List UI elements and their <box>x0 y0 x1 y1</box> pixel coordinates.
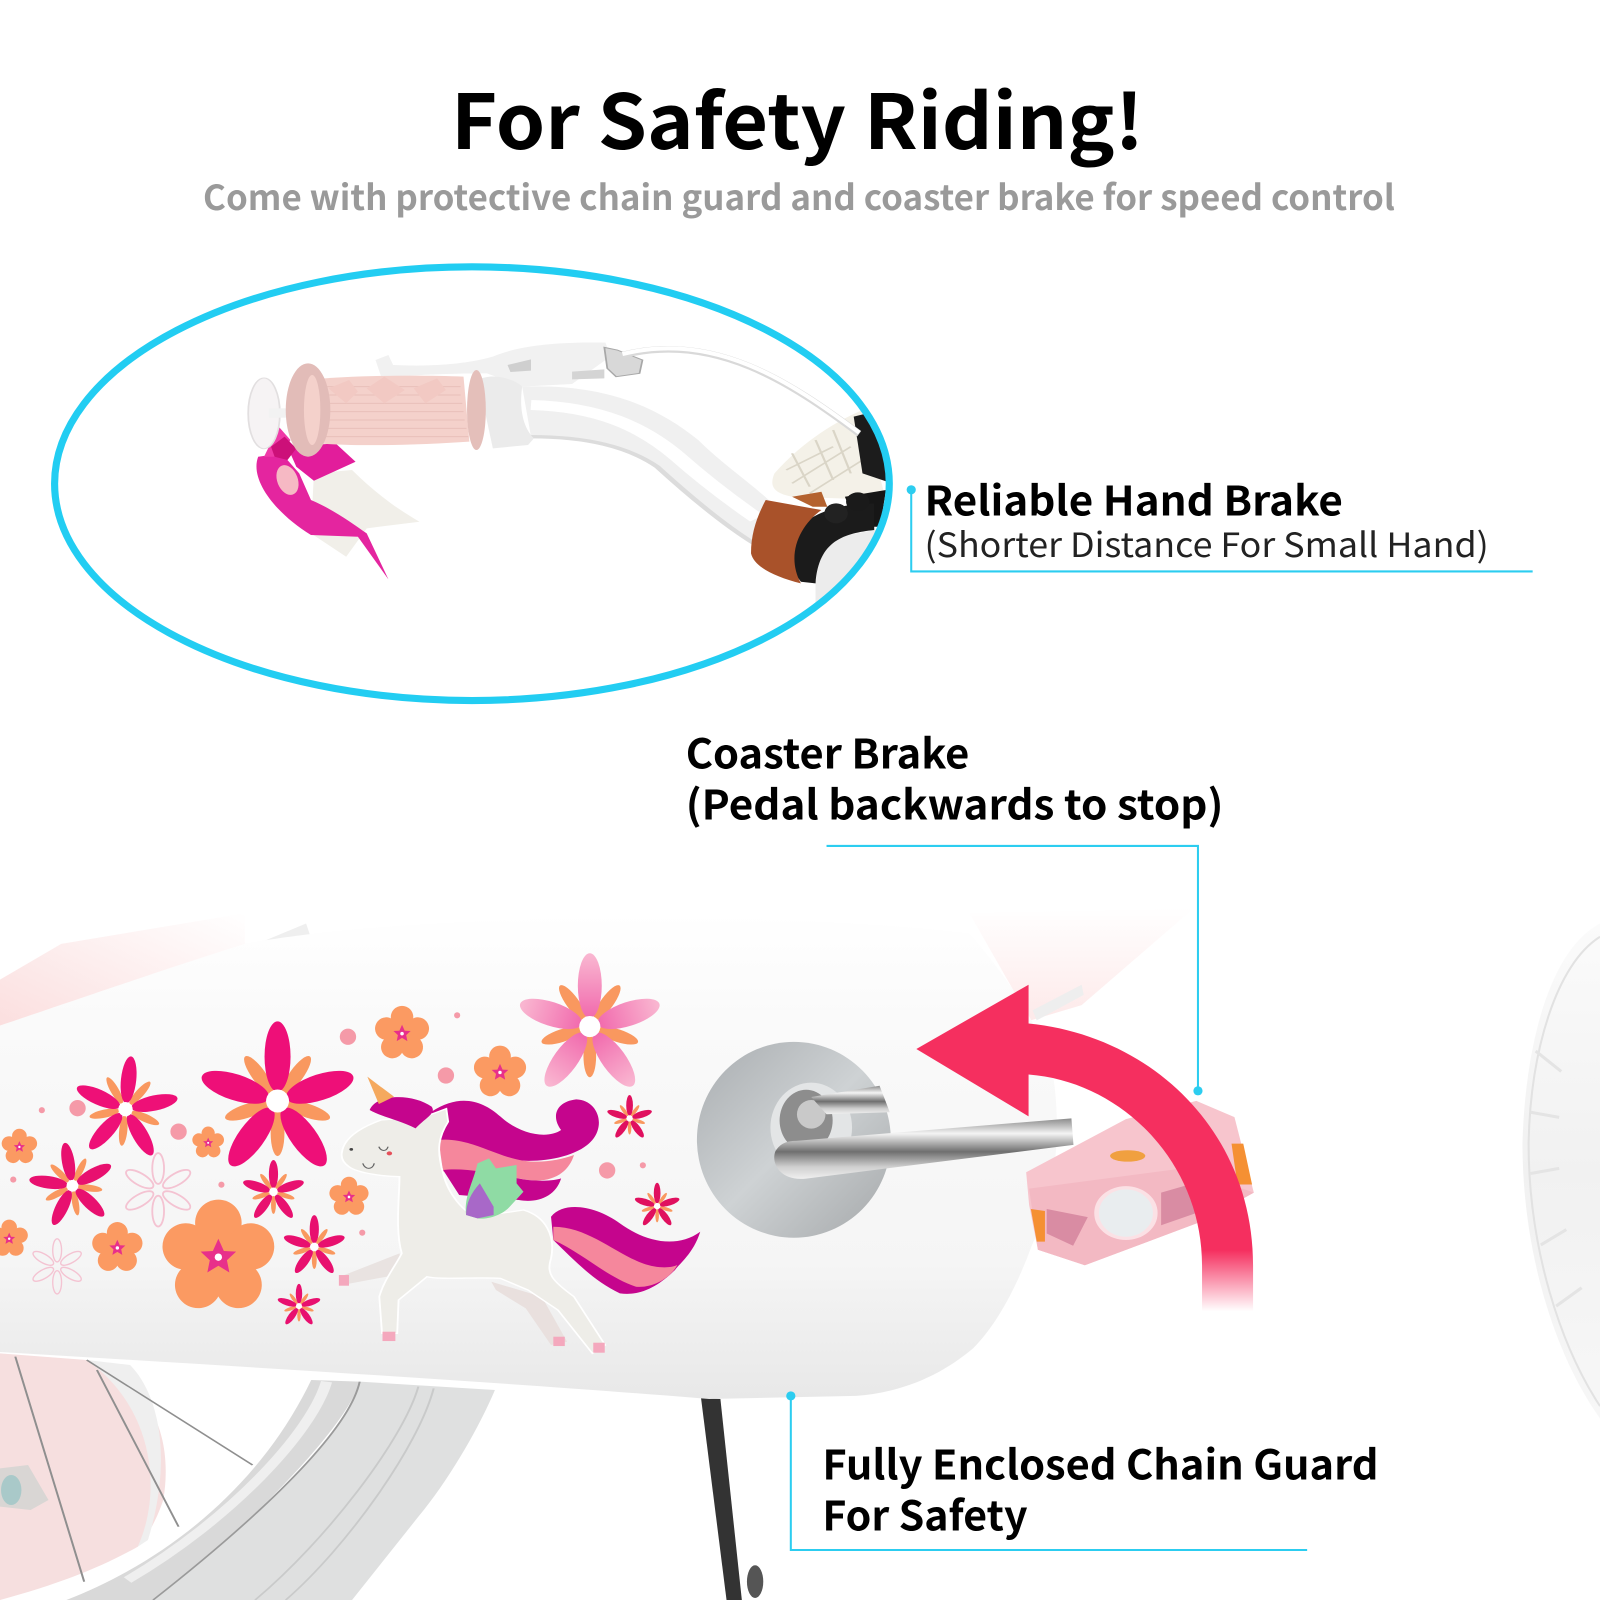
panel: hand brake photo in oval <box>55 267 892 701</box>
leader line <box>827 846 1198 1091</box>
leader line <box>911 490 1533 571</box>
leather strap <box>751 500 821 583</box>
pedal <box>1026 1101 1254 1265</box>
rear wheel <box>0 1353 495 1600</box>
callout: reliable hand brake: Reliable Hand Brake <box>924 468 1343 527</box>
horn <box>367 1077 394 1104</box>
adjuster <box>572 369 604 379</box>
kickstand <box>701 1398 763 1600</box>
axle nut <box>770 1083 852 1172</box>
callout: reliable hand brake <box>907 468 1533 571</box>
arrow <box>916 985 1253 1311</box>
tail <box>551 1207 700 1294</box>
callout: reliable hand brake: (Shorter Distance For Small Hand) <box>924 518 1489 567</box>
frame fragments behind guard <box>0 913 245 1031</box>
pink ribbon <box>256 453 388 579</box>
brake cable <box>622 349 859 434</box>
wing <box>466 1158 523 1219</box>
hooves <box>339 1275 605 1353</box>
unicorn <box>339 1077 700 1353</box>
lever <box>376 343 610 387</box>
forelock <box>370 1097 433 1128</box>
callout: chain guard: Fully Enclosed Chain Guard <box>822 1433 1379 1492</box>
illustration: handlebar with grip and brake lever <box>248 343 892 607</box>
right tire <box>1522 923 1600 1418</box>
black clamp <box>789 503 874 583</box>
title: For Safety Riding! <box>451 61 1144 171</box>
leader line <box>791 1396 1307 1550</box>
body <box>342 1109 605 1353</box>
face <box>349 1148 353 1151</box>
washer <box>697 1042 891 1238</box>
callout: coaster brake <box>686 721 1223 1095</box>
bell <box>248 378 280 449</box>
far legs <box>342 1253 404 1285</box>
callout: chain guard <box>786 1391 1379 1550</box>
callout: coaster brake: (Pedal backwards to stop) <box>686 772 1223 831</box>
oval outline <box>55 267 889 701</box>
crank tube <box>774 1118 1073 1179</box>
upper crank tube <box>811 1086 890 1114</box>
panel: bike photo <box>0 908 1600 1600</box>
collar <box>478 377 534 448</box>
subtitle: Come with protective chain guard and coaster brake for speed control <box>203 170 1395 220</box>
bar <box>522 386 769 543</box>
flowers <box>0 953 680 1326</box>
bar lower part <box>816 530 876 602</box>
white ribbon <box>311 470 420 557</box>
wicker basket <box>772 410 886 500</box>
callout: coaster brake: Coaster Brake <box>686 721 969 780</box>
grip <box>307 376 469 445</box>
grip flanges <box>286 363 330 457</box>
mane <box>432 1099 599 1161</box>
chain guard <box>0 917 1057 1399</box>
ribbon star <box>271 437 296 460</box>
callout: chain guard: For Safety <box>822 1484 1028 1543</box>
